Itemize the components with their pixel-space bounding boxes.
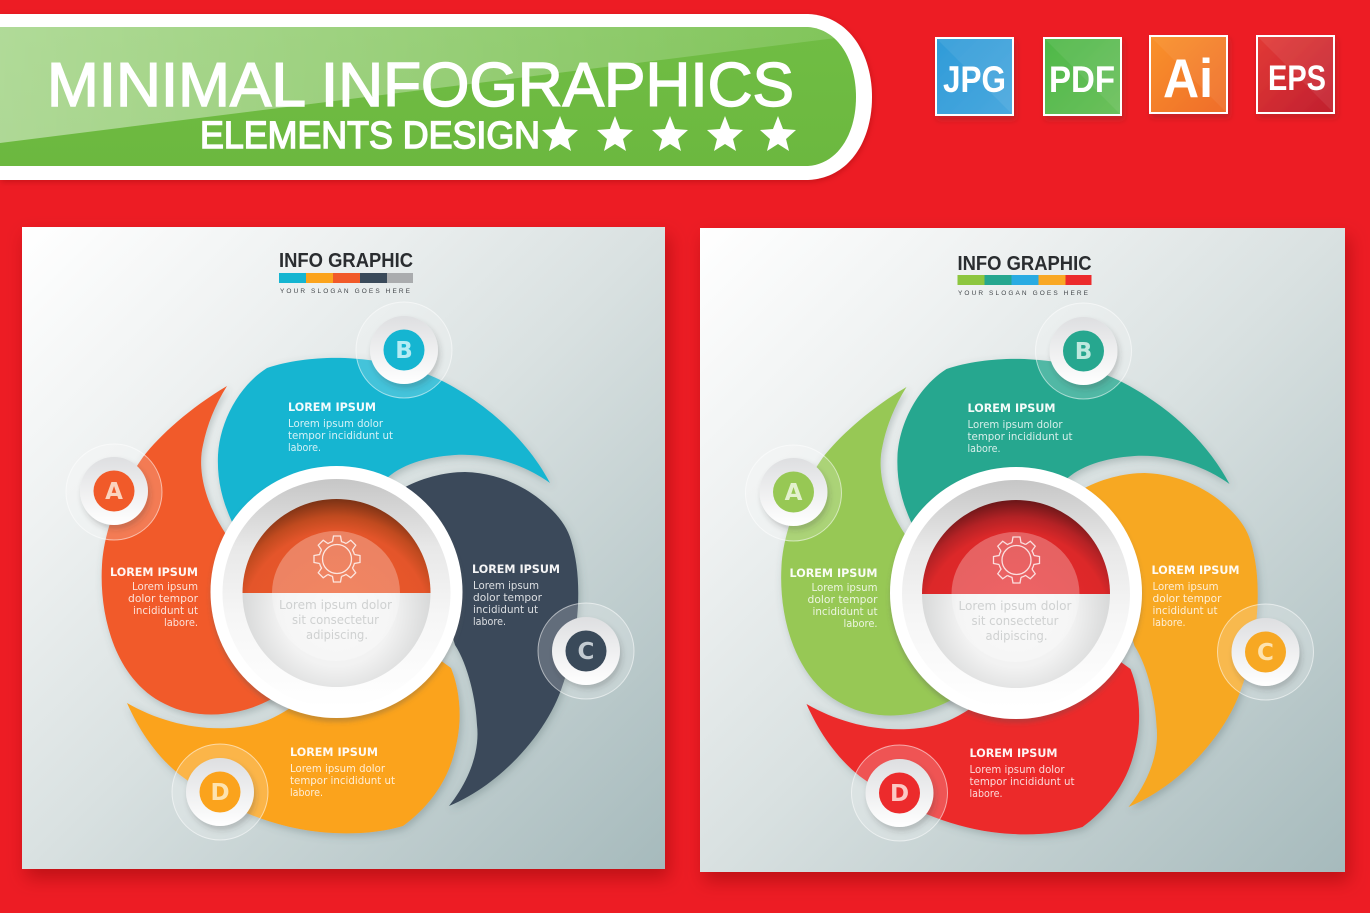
text: segment C: LOREM IPSUM: [472, 562, 560, 576]
format badge: PDF: [1044, 38, 1121, 115]
centre text: sit consectetur: [292, 612, 380, 627]
text: segment B: tempor incididunt ut: [288, 430, 393, 442]
badge D: [852, 745, 948, 841]
badge A: [746, 445, 842, 541]
text: segment B: [968, 401, 1072, 455]
badge D: D: [210, 780, 230, 806]
centre text: adipiscing.: [986, 628, 1048, 643]
text: segment B: LOREM IPSUM: [288, 400, 376, 414]
format badge: EPS: EPS: [1268, 59, 1326, 98]
text: segment B: tempor incididunt ut: [968, 431, 1072, 443]
icon: gear: [314, 536, 360, 582]
text: segment C: labore.: [473, 616, 506, 628]
text: segment A: labore.: [844, 618, 878, 630]
centre ring: [210, 466, 462, 718]
text: segment D: [970, 746, 1074, 800]
centre text: Lorem ipsum dolor: [279, 597, 393, 612]
centre text: Lorem ipsum dolor: [958, 598, 1072, 613]
panel: right infographic: [700, 228, 1345, 872]
segment B shape: [218, 358, 550, 522]
banner subtitle: ELEMENTS DESIGN: [200, 115, 540, 157]
panel: left infographic: [22, 227, 665, 869]
text: segment C: [1152, 563, 1240, 629]
segment A shape: [781, 387, 954, 715]
centre text: [958, 598, 1072, 643]
text: segment B: labore.: [968, 443, 1000, 455]
text: segment C: dolor tempor: [473, 592, 543, 604]
badge C: C: [1257, 640, 1274, 666]
text: segment D: LOREM IPSUM: [290, 745, 378, 759]
format badge: EPS: [1257, 36, 1334, 113]
text: segment C: incididunt ut: [1152, 605, 1218, 617]
heading: info graphic: INFO GRAPHIC: [279, 250, 413, 272]
text: segment A: incididunt ut: [133, 605, 198, 617]
badge A: A: [105, 479, 123, 505]
format badge: Ai: Ai: [1163, 47, 1213, 109]
text: segment B: LOREM IPSUM: [968, 401, 1056, 415]
badge C: C: [578, 639, 594, 665]
text: segment C: Lorem ipsum: [473, 580, 539, 592]
colour bars: [279, 273, 413, 283]
centre text: sit consectetur: [972, 613, 1059, 628]
text: segment A: [790, 566, 878, 630]
icon: gear: [994, 537, 1040, 583]
segment A shape: [102, 386, 275, 714]
text: segment A: [110, 565, 199, 629]
segment B shape: [897, 359, 1230, 523]
text: segment A: Lorem ipsum: [812, 582, 878, 594]
colour bars: [958, 275, 1092, 285]
text: segment A: labore.: [164, 617, 198, 629]
text: segment B: labore.: [288, 442, 321, 454]
badge D: D: [890, 781, 909, 807]
text: segment D: [290, 745, 395, 799]
banner: [0, 14, 872, 180]
text: segment C: Lorem ipsum: [1152, 581, 1218, 593]
segment C shape: [400, 472, 578, 806]
badge B: [1036, 303, 1132, 399]
centre text: adipiscing.: [306, 627, 368, 642]
centre ring: [890, 467, 1142, 719]
format badge: PDF: PDF: [1049, 59, 1115, 100]
text: segment A: LOREM IPSUM: [790, 566, 878, 580]
format badge: JPG: [936, 38, 1013, 115]
heading: info graphic: INFO GRAPHIC: [958, 253, 1092, 275]
text: segment C: LOREM IPSUM: [1152, 563, 1240, 577]
segment C shape: [1080, 473, 1258, 807]
text: segment D: LOREM IPSUM: [970, 746, 1058, 760]
text: segment C: labore.: [1152, 617, 1186, 629]
segment D shape: [806, 661, 1139, 834]
badge A: [66, 444, 162, 540]
centre text: [279, 597, 393, 642]
text: segment D: tempor incididunt ut: [970, 776, 1074, 788]
text: segment D: Lorem ipsum dolor: [290, 763, 386, 775]
text: segment A: dolor tempor: [128, 593, 199, 605]
text: segment D: tempor incididunt ut: [290, 775, 395, 787]
badge B: B: [1075, 339, 1092, 365]
badge D: [172, 744, 268, 840]
rating stars: [542, 116, 796, 151]
badge C: [538, 603, 634, 699]
segment D shape: [127, 660, 460, 833]
format badge: JPG: JPG: [943, 59, 1006, 100]
text: segment D: Lorem ipsum dolor: [970, 764, 1065, 776]
text: segment B: Lorem ipsum dolor: [968, 419, 1063, 431]
text: segment C: [472, 562, 560, 628]
slogan: YOUR SLOGAN GOES HERE: [958, 290, 1089, 297]
slogan: YOUR SLOGAN GOES HERE: [280, 288, 411, 295]
text: segment A: Lorem ipsum: [132, 581, 198, 593]
text: segment D: labore.: [290, 787, 323, 799]
text: segment B: [288, 400, 393, 454]
text: segment D: labore.: [970, 788, 1002, 800]
text: segment C: incididunt ut: [473, 604, 538, 616]
badge C: [1218, 604, 1314, 700]
format badge: Ai: [1150, 36, 1227, 113]
banner title: MINIMAL INFOGRAPHICS: [47, 51, 794, 120]
text: segment B: Lorem ipsum dolor: [288, 418, 384, 430]
text: segment C: dolor tempor: [1152, 593, 1222, 605]
badge B: B: [395, 338, 413, 364]
text: segment A: incididunt ut: [812, 606, 878, 618]
text: segment A: dolor tempor: [808, 594, 878, 606]
text: segment A: LOREM IPSUM: [110, 565, 198, 579]
badge B: [356, 302, 452, 398]
badge A: A: [785, 480, 803, 506]
